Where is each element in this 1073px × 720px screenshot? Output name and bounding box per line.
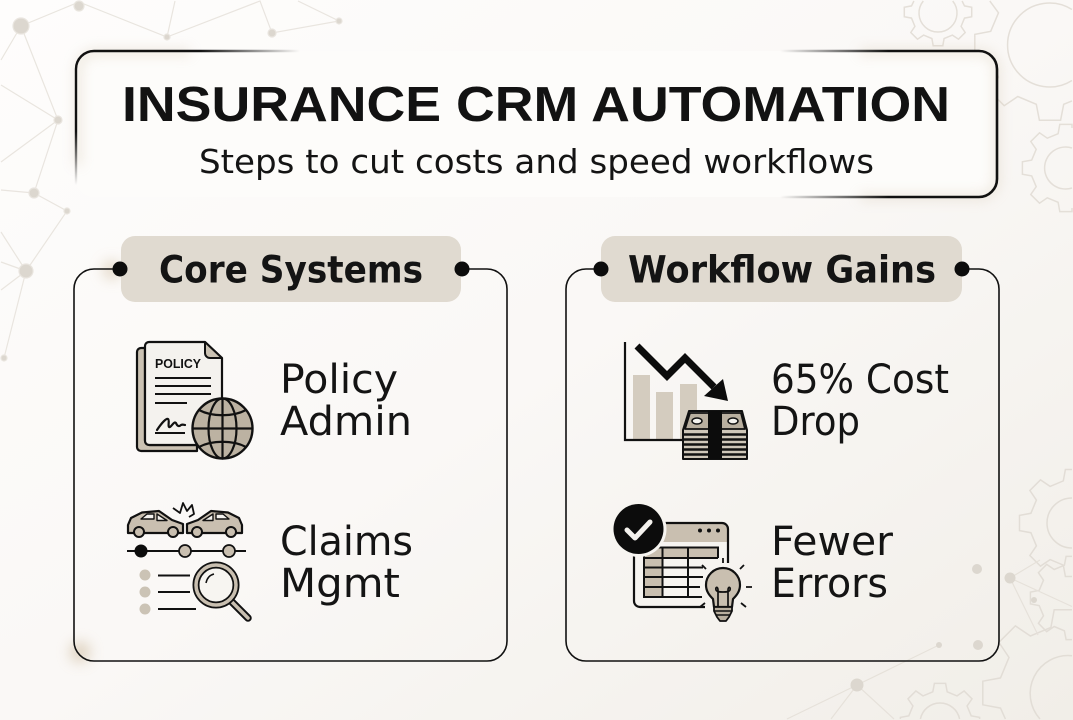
label: fewer errors: Errors	[771, 561, 888, 607]
heading pill: core systems: Core Systems	[159, 248, 423, 292]
title frame	[76, 51, 997, 197]
label: claims mgmt: Claims	[280, 519, 413, 565]
panel: workflow gains	[566, 236, 999, 661]
icon: right car	[187, 511, 242, 537]
title: INSURANCE CRM AUTOMATION	[122, 78, 950, 132]
check badge	[610, 501, 666, 557]
checklist	[140, 570, 196, 614]
background gears: top right	[904, 1, 1072, 212]
icon: policy document and globe: POLICY	[155, 357, 202, 371]
icon: spreadsheet, check badge and bulb	[610, 501, 752, 621]
heading pill: core systems	[112, 236, 470, 302]
background gears and network: bottom right	[787, 470, 1072, 719]
spreadsheet window	[634, 523, 728, 607]
icon: magnifier	[196, 565, 248, 618]
timeline	[127, 544, 246, 558]
panel: core systems	[70, 236, 507, 662]
subtitle: Steps to cut costs and speed workflows	[199, 142, 874, 181]
label: claims mgmt: Mgmt	[280, 561, 400, 607]
heading pill: workflow gains: Workflow Gains	[628, 248, 936, 292]
arrow	[637, 346, 728, 401]
bars	[633, 375, 697, 440]
icon: policy document and globe	[137, 342, 252, 458]
label: 65% cost drop: 65% Cost	[771, 357, 949, 403]
icon: left car	[128, 511, 183, 537]
background network: top left	[1, 1, 342, 361]
label: 65% cost drop: Drop	[771, 399, 860, 445]
icon: falling chart and money	[625, 342, 747, 459]
icon: globe	[192, 398, 252, 458]
light bulb	[694, 558, 752, 621]
label: policy admin: Policy	[280, 357, 398, 403]
heading pill: workflow gains	[594, 236, 970, 302]
label: policy admin: Admin	[280, 399, 412, 445]
icon: car crash, timeline and magnifier	[127, 503, 248, 618]
money stack	[683, 411, 747, 459]
label: fewer errors: Fewer	[771, 519, 894, 565]
